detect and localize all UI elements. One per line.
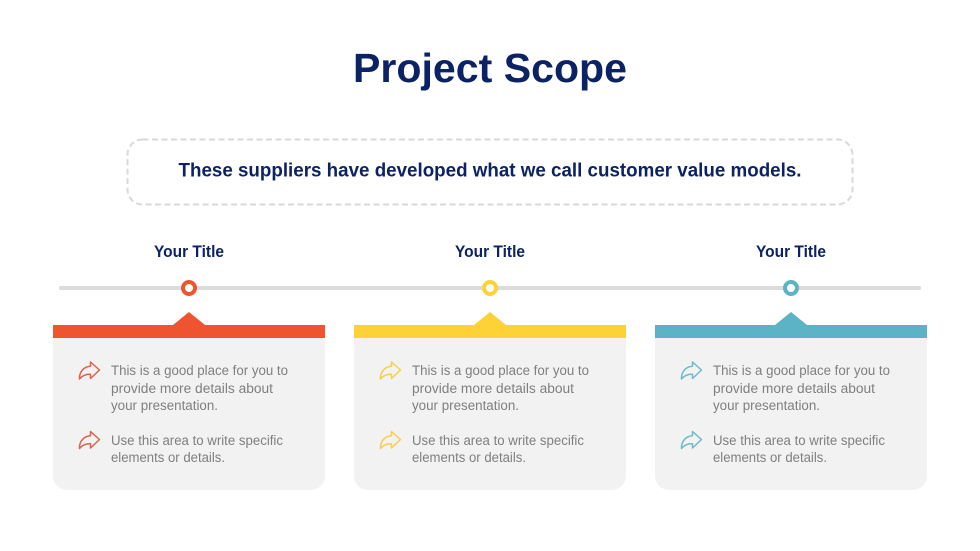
text block 2a: provide more details about — [412, 381, 574, 396]
text block 1a: provide more details about — [111, 381, 273, 396]
icon: arrow 2b — [380, 432, 400, 448]
text block 1a: your presentation. — [111, 398, 218, 413]
card body 3 — [655, 338, 927, 490]
title: Project Scope — [353, 45, 627, 91]
text block 2a: your presentation. — [412, 398, 519, 413]
icon: arrow 1a — [79, 362, 100, 379]
heading: column 2: Your Title — [455, 242, 525, 261]
text block 1a: This is a good place for you to — [111, 363, 288, 378]
callout: dashed box with statement: These suppliers have developed what we call customer value models. — [178, 160, 802, 182]
card body 2 — [354, 338, 626, 490]
text block 3b: elements or details. — [713, 450, 827, 465]
icon: arrow 1b — [79, 432, 100, 448]
callout: dashed box with statement — [128, 140, 852, 204]
text block 3a: your presentation. — [713, 398, 820, 413]
panel: column 3 — [655, 242, 927, 490]
text block 3a — [713, 363, 890, 413]
text block 2b: elements or details. — [412, 450, 526, 465]
text block 3b — [713, 433, 885, 465]
text block 2a: This is a good place for you to — [412, 363, 589, 378]
text block 3b: Use this area to write specific — [713, 433, 885, 448]
text block 2a — [412, 363, 589, 413]
text block 2b: Use this area to write specific — [412, 433, 584, 448]
header bar with pointer 1 — [53, 312, 325, 338]
header bar with pointer 2 — [354, 312, 626, 338]
text block 1b — [111, 433, 283, 465]
heading: column 1: Your Title — [154, 242, 224, 261]
text block 3a: provide more details about — [713, 381, 875, 396]
text block 1b: elements or details. — [111, 450, 225, 465]
timeline marker 1 — [183, 282, 195, 294]
heading: column 3: Your Title — [756, 242, 826, 261]
icon: arrow 2a — [380, 362, 400, 379]
icon: arrow 3a — [681, 362, 702, 379]
card body 1 — [53, 338, 325, 490]
panel: column 1 — [53, 242, 325, 490]
timeline line — [59, 286, 921, 290]
text block 3a: This is a good place for you to — [713, 363, 890, 378]
header bar with pointer 3 — [655, 312, 927, 338]
icon: arrow 3b — [681, 432, 702, 448]
text block 1a — [111, 363, 288, 413]
timeline marker 3 — [785, 282, 797, 294]
text block 1b: Use this area to write specific — [111, 433, 283, 448]
panel: column 2 — [354, 242, 626, 490]
text block 2b — [412, 433, 584, 465]
timeline marker 2 — [484, 282, 496, 294]
